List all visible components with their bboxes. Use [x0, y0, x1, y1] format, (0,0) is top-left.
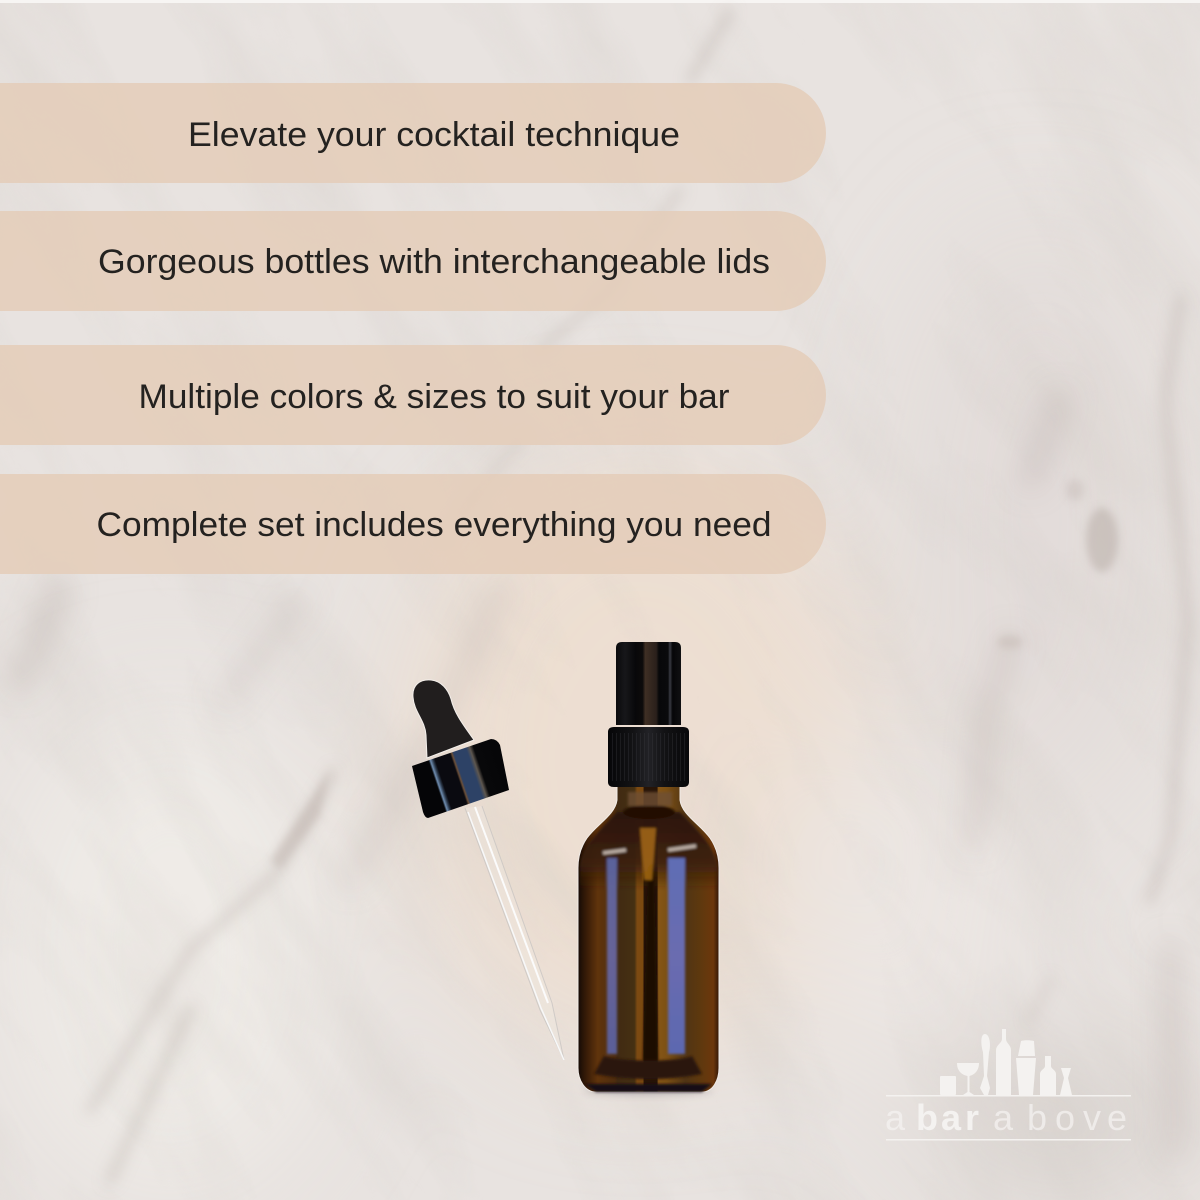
logo wordmark: a	[885, 1097, 906, 1138]
logo: a bar above	[885, 1029, 1131, 1140]
logo wordmark: bar	[916, 1097, 979, 1138]
banner: elevate: Elevate your cocktail technique	[188, 116, 680, 154]
banner: colors	[0, 345, 826, 445]
banner: colors: Multiple colors & sizes to suit your bar	[138, 378, 730, 416]
logo wordmark: above	[993, 1097, 1127, 1138]
spray collar	[608, 727, 689, 787]
bottle shadow	[584, 1086, 712, 1094]
dropper rubber bulb	[413, 680, 474, 758]
dropper glass tube	[465, 806, 564, 1060]
banner: complete set: Complete set includes everything you need	[96, 506, 772, 544]
logo rules	[886, 1095, 1131, 1096]
spray cap	[616, 642, 681, 725]
bottle body	[578, 786, 719, 1092]
bottle reflections	[580, 792, 717, 1092]
logo barware silhouettes	[940, 1029, 1072, 1095]
banner: bottles: Gorgeous bottles with interchangeable lids	[98, 243, 770, 281]
banner: bottles	[0, 211, 826, 311]
dropper	[412, 680, 564, 1060]
banner: complete set	[0, 474, 826, 574]
banner: elevate	[0, 83, 826, 183]
dropper collar	[412, 739, 509, 818]
amber bottle	[578, 642, 719, 1094]
